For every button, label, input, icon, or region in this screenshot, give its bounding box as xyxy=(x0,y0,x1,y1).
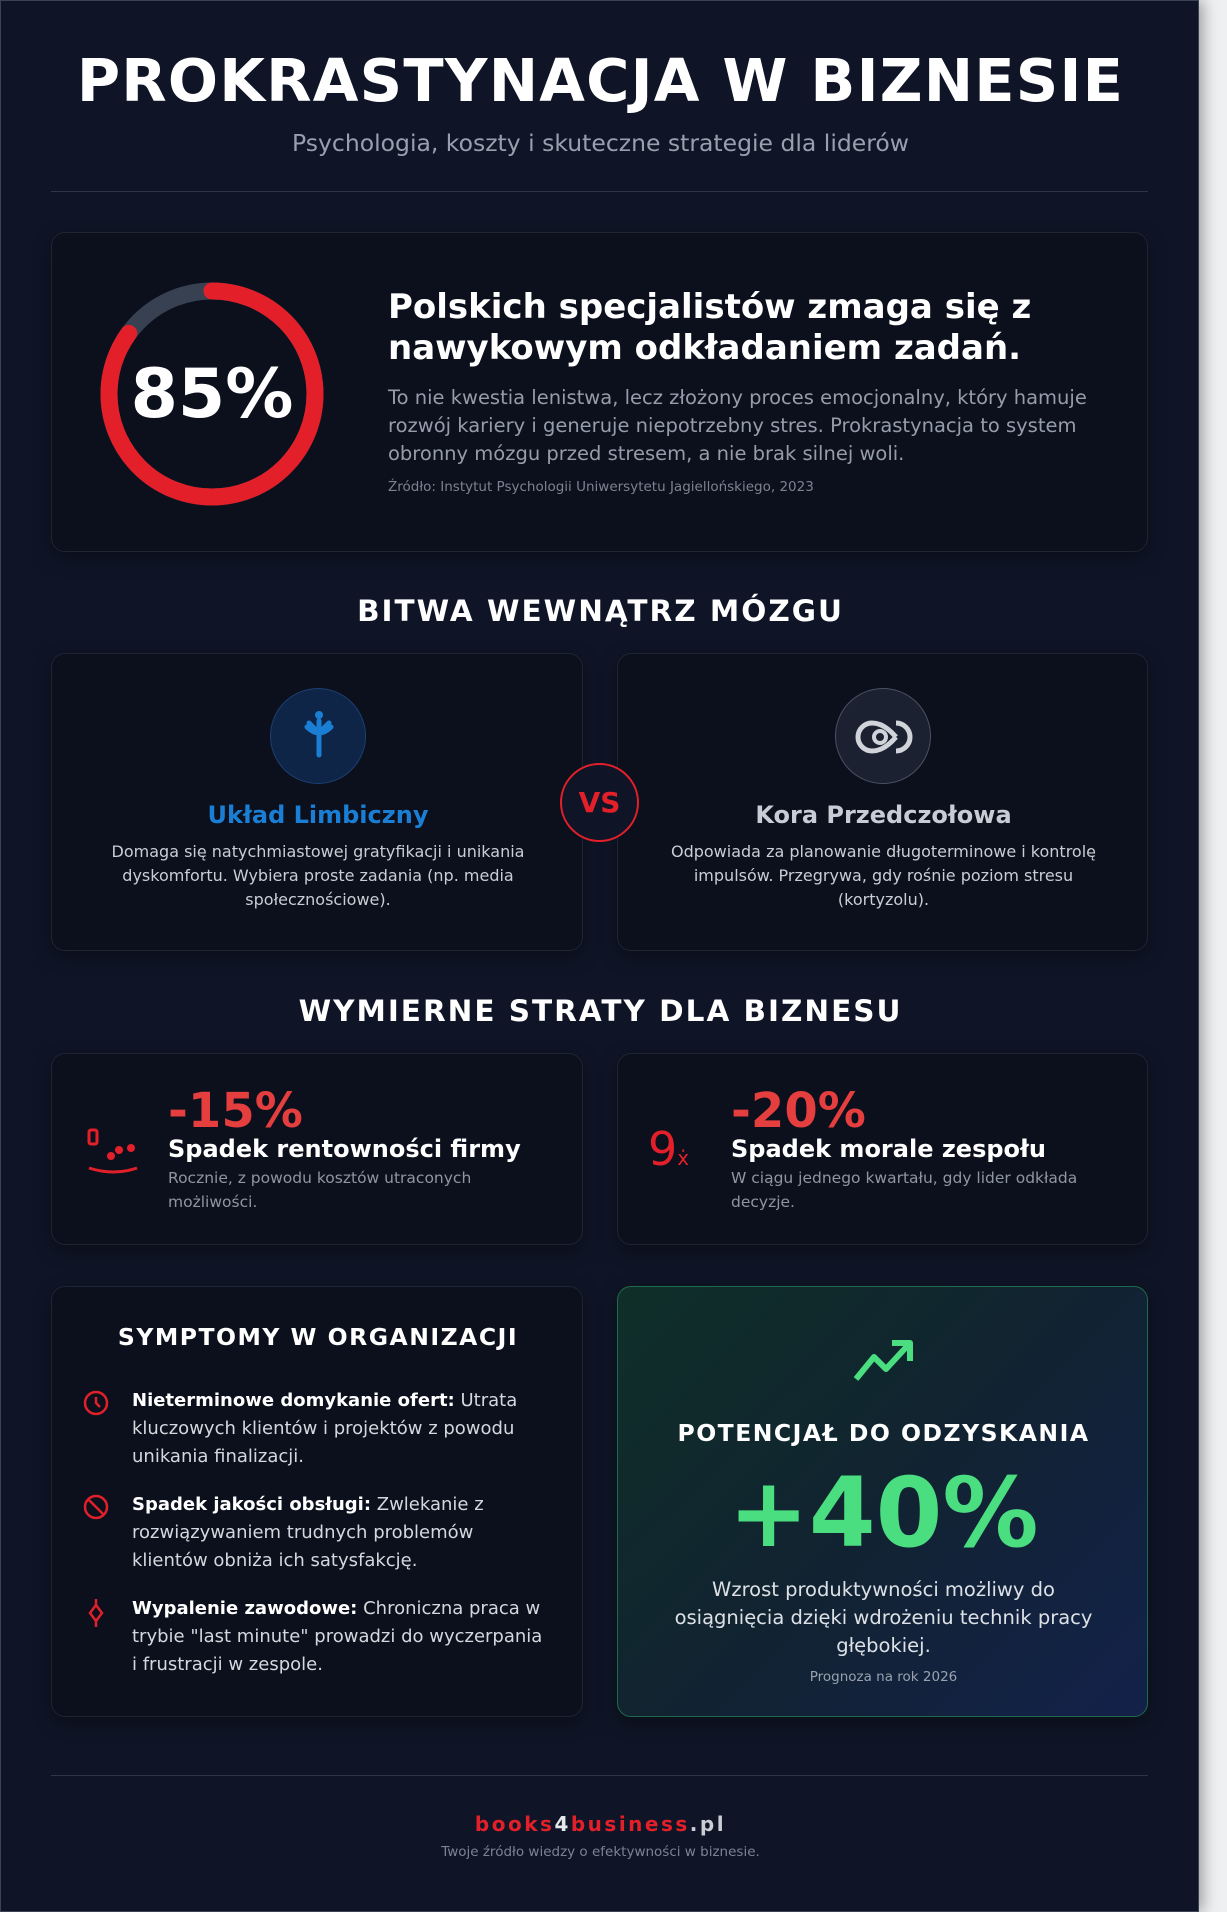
title: PROKRASTYNACJA W BIZNESIE xyxy=(77,46,1124,115)
item: service quality xyxy=(84,1494,484,1571)
icon: VS badge xyxy=(560,763,639,842)
donut chart: 85% xyxy=(131,355,293,434)
panel: loss 20: Spadek morale zespołu xyxy=(731,1135,1046,1163)
text block: To nie kwestia lenistwa, lecz złożony proces emocjonalny, który hamuje rozwój kariery i generuje niepotrzebny stres. Prokrastynacja to system obronny mózgu przed stresem, a nie brak silnej woli. xyxy=(388,386,1087,465)
panel: loss 15: Rocznie, z powodu kosztów utraconych możliwości. xyxy=(168,1169,471,1211)
heading: brain battle: BITWA WEWNĄTRZ MÓZGU xyxy=(357,594,844,628)
description: Odpowiada za planowanie długoterminowe i kontrolę impulsów. Przegrywa, gdy rośnie poziom stresu (kortyzolu). xyxy=(671,842,1096,909)
icon: prefrontal xyxy=(835,688,931,784)
heading: losses: WYMIERNE STRATY DLA BIZNESU xyxy=(299,994,902,1028)
panel: loss 15 xyxy=(51,1053,583,1245)
panel: symptoms xyxy=(51,1286,583,1717)
stat: -15% xyxy=(168,1083,303,1139)
panel: prefrontal xyxy=(617,653,1148,951)
icon: VS badge: VS xyxy=(579,786,620,819)
subtitle: Psychologia, koszty i skuteczne strategie dla liderów xyxy=(292,129,909,157)
big stat: +40% xyxy=(728,1457,1039,1569)
heading: Polskich specjalistów zmaga się z nawykowym odkładaniem zadań. xyxy=(388,287,1031,368)
heading: SYMPTOMY W ORGANIZACJI xyxy=(118,1323,518,1351)
panel: limbic xyxy=(51,653,583,951)
icon: chart down xyxy=(88,1128,138,1174)
source: Źródło: Instytut Psychologii Uniwersytetu Jagiellońskiego, 2023 xyxy=(388,479,814,495)
panel: loss 20 xyxy=(617,1053,1148,1245)
title: Układ Limbiczny xyxy=(208,801,428,829)
title: Kora Przedczołowa xyxy=(755,801,1012,829)
donut chart xyxy=(100,282,324,506)
panel: loss 15: Spadek rentowności firmy xyxy=(168,1135,521,1163)
item: burnout xyxy=(88,1598,542,1675)
footer tagline: Twoje źródło wiedzy o efektywności w biznesie. xyxy=(441,1844,760,1860)
panel: symptoms: Wypalenie zawodowe: Chroniczna praca w trybie "last minute" prowadzi do wyczerpania i frustracji w zespole. xyxy=(132,1598,542,1675)
note: Prognoza na rok 2026 xyxy=(810,1669,957,1685)
panel: potential xyxy=(617,1286,1148,1717)
description: Wzrost produktywności możliwy do osiągnięcia dzięki wdrożeniu technik pracy głębokiej. xyxy=(675,1578,1092,1657)
item: deadlines xyxy=(84,1390,517,1467)
footer brand: books4business.pl xyxy=(475,1812,726,1836)
stat: -20% xyxy=(731,1083,866,1139)
icon: trend up xyxy=(854,1340,913,1381)
description: Domaga się natychmiastowej gratyfikacji i unikania dyskomfortu. Wybiera proste zadania (np. media społecznościowe). xyxy=(112,842,524,909)
panel: symptoms: Nieterminowe domykanie ofert: Utrata kluczowych klientów i projektów z powodu unikania finalizacji. xyxy=(132,1390,517,1467)
heading: POTENCJAŁ DO ODZYSKANIA xyxy=(677,1419,1090,1447)
panel: 85% stat xyxy=(51,232,1148,552)
icon: morale: 9ẋ xyxy=(648,1122,689,1176)
icon: limbic xyxy=(270,688,366,784)
panel: loss 20: W ciągu jednego kwartału, gdy lider odkłada decyzje. xyxy=(731,1169,1077,1211)
panel: symptoms: Spadek jakości obsługi: Zwlekanie z rozwiązywaniem trudnych problemów klientów obniża ich satysfakcję. xyxy=(132,1494,484,1571)
